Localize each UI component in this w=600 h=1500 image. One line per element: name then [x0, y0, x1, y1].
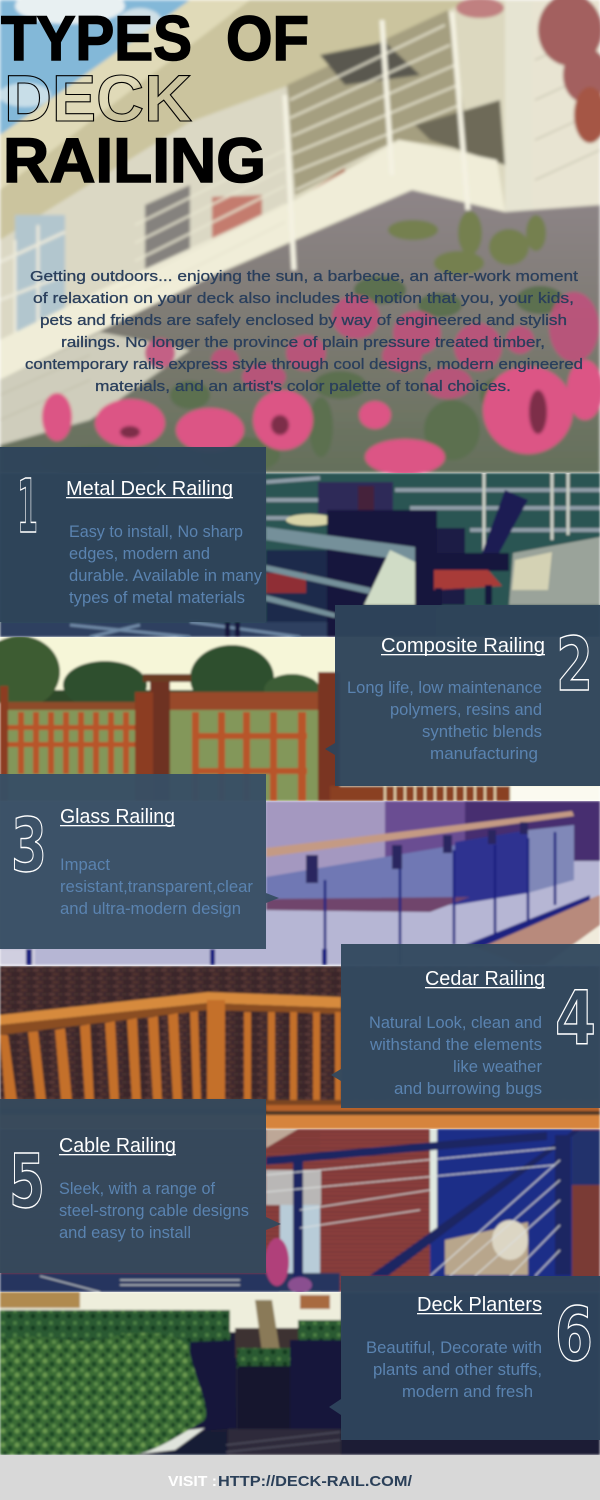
intro paragraph: pets and friends are safely enclosed by way of engineered and stylish [40, 312, 567, 329]
panel: 1 metal deck railing [0, 447, 266, 622]
panel: 1 metal deck railing: edges, modern and [69, 545, 210, 563]
intro paragraph [25, 268, 583, 395]
panel: 2 composite railing: manufacturing [430, 745, 538, 763]
panel: 4 cedar railing: and burrowing bugs [394, 1080, 542, 1098]
panel: 2 composite railing: Long life, low maintenance [347, 679, 542, 697]
panel: 6 deck planters: Beautiful, Decorate with [366, 1339, 542, 1357]
photo: balcony and roses hero background [0, 0, 600, 478]
photo: glass railing interior [0, 801, 600, 965]
panel: 1 metal deck railing: 1 [17, 464, 38, 550]
footer: visit link: HTTP://DECK-RAIL.COM/ [218, 1473, 413, 1490]
footer: visit link: VISIT : [168, 1473, 217, 1490]
intro paragraph: Getting outdoors... enjoying the sun, a barbecue, an after-work moment [30, 268, 579, 285]
panel: 2 composite railing [325, 605, 600, 786]
panel: 3 glass railing: Impact [60, 856, 110, 874]
panel: 3 glass railing: resistant,transparent,clear [60, 878, 254, 896]
panel: 4 cedar railing [331, 944, 600, 1108]
panel: 4 cedar railing: Cedar Railing [425, 968, 545, 990]
panel: 4 cedar railing: Natural Look, clean and [369, 1014, 542, 1032]
panel: 6 deck planters: modern and fresh [402, 1383, 533, 1401]
intro paragraph: contemporary rails express style through cool designs, modern engineered [25, 356, 583, 373]
intro paragraph: railings. No longer the province of plain pressure treated timber, [61, 334, 545, 351]
panel: 1 metal deck railing: Easy to install, No sharp [69, 523, 243, 541]
panel: 5 cable railing [0, 1099, 281, 1273]
title [1, 4, 309, 196]
panel: 2 composite railing: synthetic blends [422, 723, 542, 741]
panel: 4 cedar railing: withstand the elements [369, 1036, 542, 1054]
panel: 3 glass railing: 3 [11, 803, 47, 889]
panel: 4 cedar railing: like weather [453, 1058, 543, 1076]
footer: visit link [0, 1455, 600, 1500]
title: OF [226, 4, 309, 74]
photo: composite railing fence and trees [0, 636, 600, 801]
title: RAILING [3, 126, 266, 196]
intro paragraph: materials, and an artist's color palette of tonal choices. [95, 378, 511, 395]
title: DECK [4, 61, 192, 135]
panel: 5 cable railing: Sleek, with a range of [59, 1180, 215, 1198]
panel: 1 metal deck railing: Metal Deck Railing [66, 478, 233, 500]
panel: 3 glass railing: Glass Railing [60, 806, 175, 828]
panel: 3 glass railing [0, 774, 279, 949]
divider line between glass and cedar photos [0, 965, 600, 966]
intro paragraph: of relaxation on your deck also includes the notion that you, your kids, [33, 290, 574, 307]
panel: 5 cable railing: Cable Railing [59, 1135, 176, 1157]
panel: 5 cable railing: 5 [9, 1139, 45, 1225]
panel: 6 deck planters: Deck Planters [417, 1294, 542, 1316]
panel: 5 cable railing: steel-strong cable designs [59, 1202, 249, 1220]
panel: 6 deck planters [329, 1276, 600, 1440]
panel: 2 composite railing: polymers, resins and [390, 701, 542, 719]
panel: 3 glass railing: and ultra-modern design [60, 900, 241, 918]
photo: cedar railing against brick [0, 966, 600, 1129]
panel: 1 metal deck railing: durable. Available in many [69, 567, 263, 585]
photo: cable railing on stairs by brick house [0, 1129, 600, 1295]
photo: deck planters with hedges [0, 1292, 600, 1455]
panel: 5 cable railing: and easy to install [59, 1224, 191, 1242]
title: TYPES [1, 4, 192, 74]
panel: 2 composite railing: Composite Railing [381, 635, 545, 657]
panel: 6 deck planters: plants and other stuffs, [373, 1361, 542, 1379]
panel: 1 metal deck railing: types of metal materials [69, 589, 245, 607]
photo: metal deck railing with dining set [0, 473, 600, 637]
